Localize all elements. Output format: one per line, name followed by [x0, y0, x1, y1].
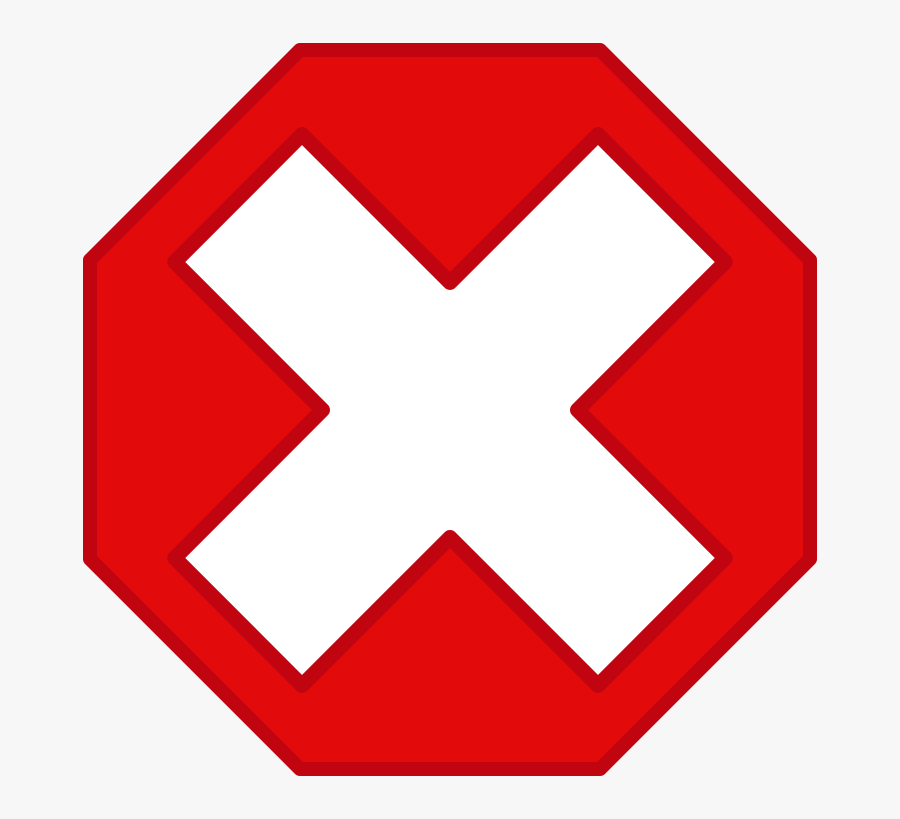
white X — [175, 134, 725, 686]
octagon — [90, 50, 810, 769]
